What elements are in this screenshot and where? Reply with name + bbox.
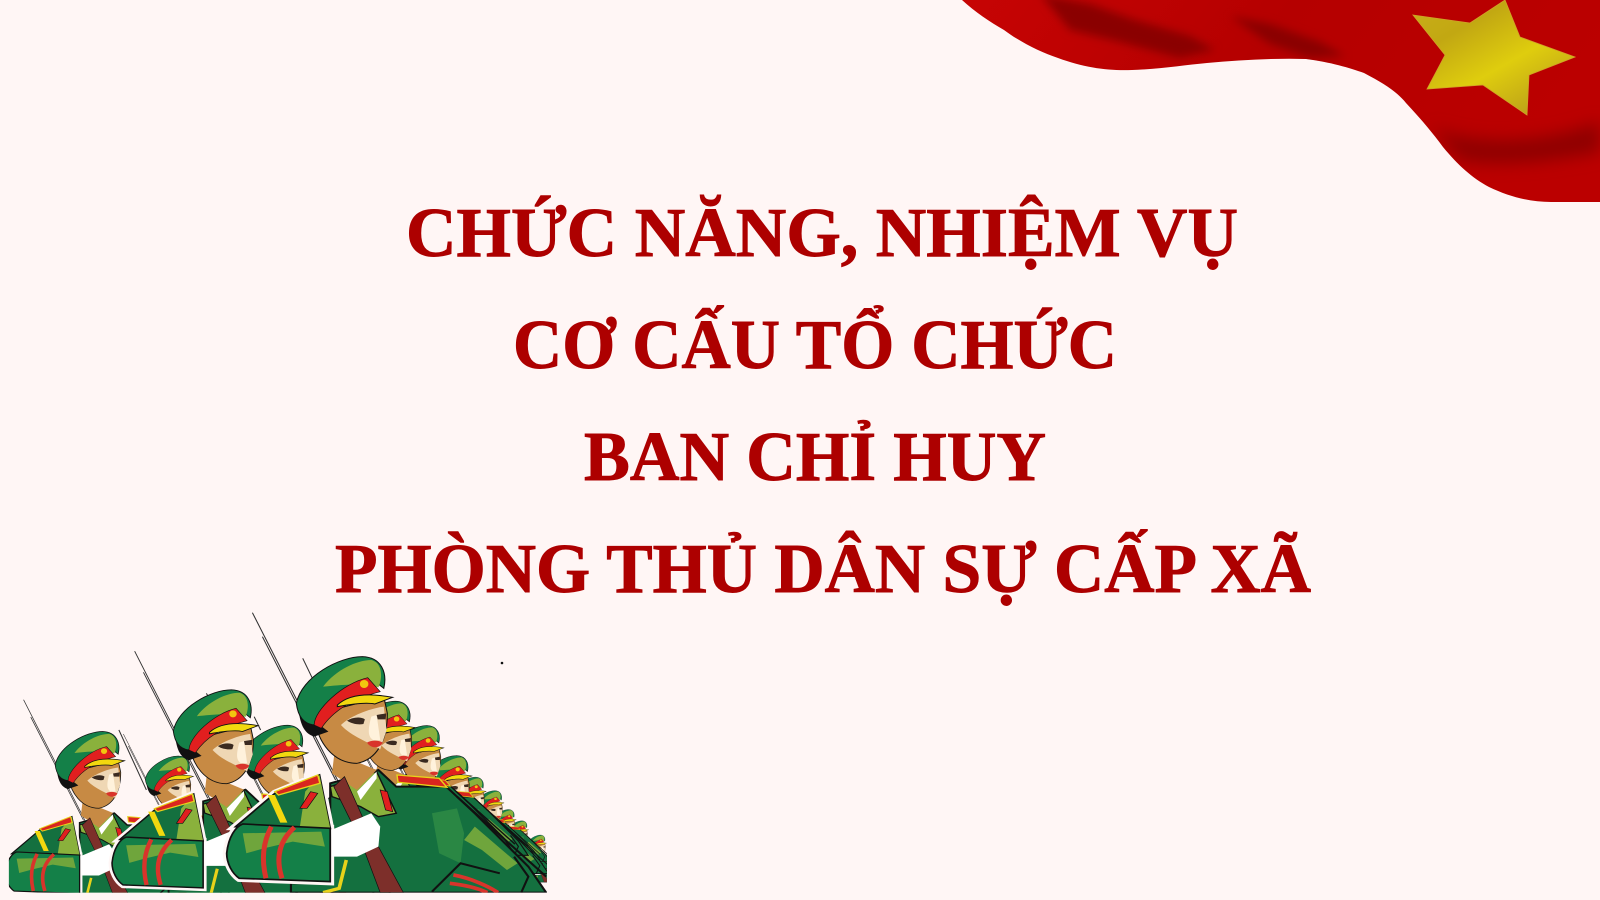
icon: star: [1413, 0, 1575, 115]
title: [335, 195, 1311, 608]
illustration: marching soldiers with rifles: [5, 613, 577, 900]
title line 4: PHÒNG THỦ DÂN SỰ CẤP XÃ: [335, 529, 1311, 608]
title line 3: BAN CHỈ HUY: [584, 419, 1046, 496]
small dot: [501, 662, 503, 664]
flag: red waving flag with yellow star: [950, 0, 1600, 210]
title line 2: CƠ CẤU TỔ CHỨC: [513, 305, 1117, 384]
title line 1: CHỨC NĂNG, NHIỆM VỤ: [406, 195, 1238, 272]
